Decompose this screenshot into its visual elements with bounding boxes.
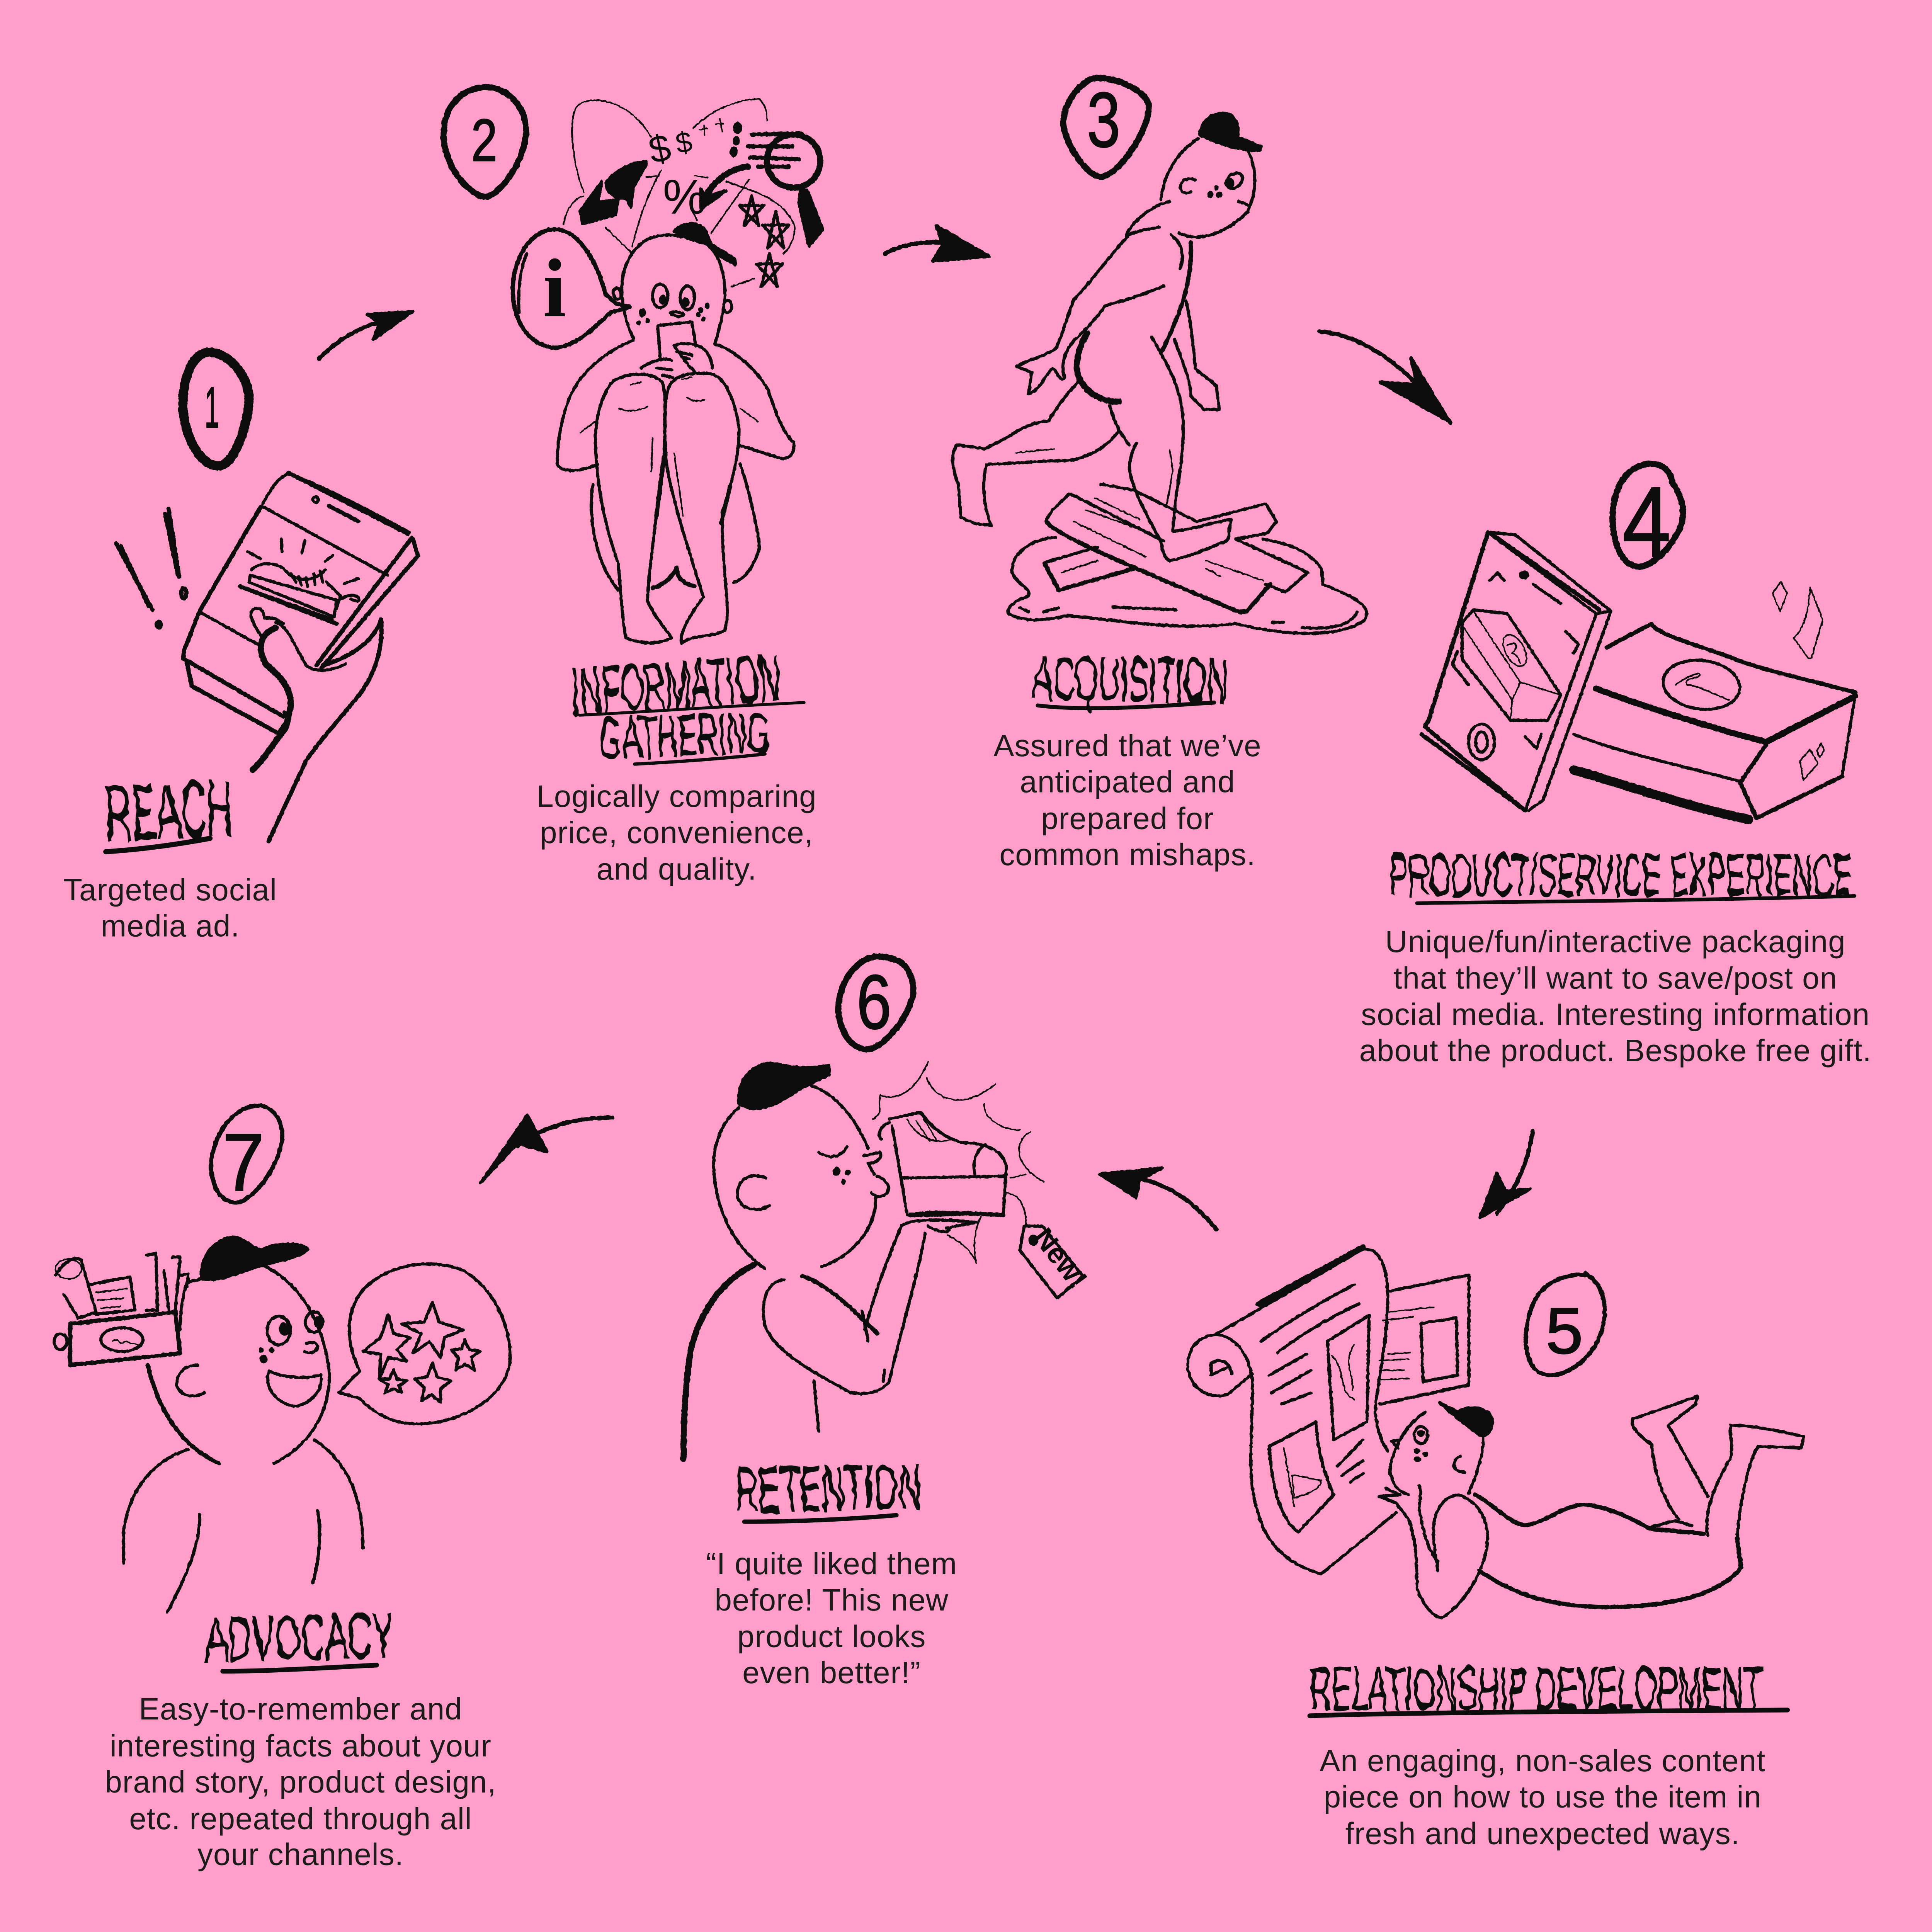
body and arms (1017, 202, 1219, 410)
text: product description: Unique/fun/interactive packaging (1385, 924, 1846, 959)
icon: curved arrow (701, 167, 748, 209)
panel: step 1 reach: REACH (104, 763, 235, 859)
badge digit: 5: 5 (1546, 1294, 1583, 1367)
badge: number 6 circle (838, 956, 913, 1049)
badge: number 2 circle (444, 87, 526, 197)
text: advocacy description: your channels. (197, 1837, 404, 1872)
icon: broken planks (1044, 484, 1308, 612)
panel: step 4 product/service experience (1359, 464, 1872, 1068)
icon: sparkles (1772, 582, 1824, 780)
icon: price tag (1006, 1193, 1083, 1298)
legs (953, 337, 1231, 561)
icon: open box with items (54, 1253, 188, 1365)
text: advocacy description: Easy-to-remember and (139, 1692, 463, 1726)
arm and hand (1379, 1485, 1488, 1618)
body and arm (684, 1220, 976, 1459)
icon: shoe ad on screen (240, 539, 359, 624)
puddle (1008, 537, 1367, 633)
text: advocacy description: brand story, product design, (105, 1765, 497, 1799)
icon: package box (1574, 624, 1855, 820)
illustration: phone and package (1422, 464, 1855, 820)
badge: number 7 circle (211, 1106, 282, 1202)
text: retention description: before! This new (714, 1583, 949, 1617)
speech bubble with stars (338, 1264, 510, 1424)
arrow: 2 to 3 (885, 226, 989, 261)
panel: step 3 acquisition: ACQUISITION (1032, 643, 1230, 717)
arrow: 1 to 2 (319, 311, 413, 359)
arrow: 4 to 5 (1480, 1131, 1533, 1218)
shoulders (124, 1440, 363, 1612)
head with cap (1161, 113, 1261, 237)
text: advocacy description: etc. repeated through all (129, 1801, 472, 1836)
badge: number 1 circle (183, 352, 249, 466)
badge digit: 7: 7 (223, 1117, 264, 1208)
text: advocacy description: interesting facts about your (110, 1728, 492, 1763)
panel: step 3 acquisition (953, 77, 1367, 872)
phone and hands (641, 322, 712, 377)
panel: step 2 information gathering (444, 87, 823, 886)
illustration: person reading scroll (1188, 1247, 1804, 1618)
heading: information gathering: INFORMATION (569, 640, 783, 730)
badge: number 4 circle (1612, 464, 1683, 567)
icon glyph: dollar signs: $ (645, 126, 674, 172)
head with cap (1390, 1403, 1493, 1495)
text: retention description: “I quite liked them (706, 1546, 957, 1581)
text: product description: about the product. Bespoke free gift. (1359, 1033, 1872, 1068)
icon: phone (183, 473, 418, 733)
tag label: New! (1027, 1222, 1094, 1295)
arrow: 6 to 7 (481, 1115, 612, 1183)
illustration: seated person researching (513, 99, 823, 643)
panel: step 5 relationship development (1188, 1247, 1804, 1850)
heading: information gathering: GATHERING (598, 699, 771, 772)
text: acquisition description: common mishaps. (999, 837, 1256, 872)
illustration: person stepping on broken planks (953, 78, 1367, 633)
text: reach description: Targeted social (63, 872, 277, 907)
panel: step 7 advocacy (54, 1106, 510, 1872)
text: information gathering description: and quality. (597, 852, 757, 886)
text: reach description: media ad. (101, 909, 240, 943)
text: information gathering description: price, convenience, (540, 815, 813, 850)
panel: step 1 reach: 1 (205, 375, 219, 440)
text: information gathering description: Logically comparing (536, 779, 817, 813)
heading: acquisition (1032, 643, 1230, 717)
heading: information gathering (569, 640, 804, 772)
heading: advocacy (205, 1600, 395, 1674)
panel: step 1 reach (63, 352, 418, 943)
heading: retention (735, 1451, 922, 1525)
heading: reach (104, 763, 235, 859)
head with cap (613, 224, 735, 344)
text: retention description: even better!” (742, 1655, 921, 1690)
icon: stars (740, 196, 789, 287)
illustration: person kissing a shoe (684, 956, 1083, 1459)
arrow: 3 to 4 (1320, 332, 1450, 423)
icon glyph: dollar signs: $ (673, 125, 695, 160)
icon glyph: dollar signs (645, 125, 695, 172)
text: product description: social media. Interesting information (1361, 997, 1870, 1031)
arrow: 5 to 6 (1099, 1168, 1216, 1230)
text: acquisition description: Assured that we’ve (993, 728, 1262, 763)
badge: number 3 circle (1063, 78, 1149, 177)
text: relationship description: fresh and unexpected ways. (1345, 1816, 1740, 1850)
icon: hand and heart (251, 608, 381, 841)
head with cap (714, 1063, 888, 1269)
icon glyph: percent sign: % (663, 169, 706, 224)
text: product description: that they’ll want to save/post on (1393, 961, 1837, 995)
text: retention description: product looks (737, 1619, 926, 1653)
icon: exclamation marks (116, 509, 186, 628)
speech bubble (513, 230, 630, 348)
icon glyph: info letter: i (543, 242, 566, 334)
body and legs (557, 340, 794, 643)
icon: magnifying glass (748, 133, 823, 246)
head with cap (148, 1237, 329, 1463)
icon: shoe (872, 1062, 1044, 1263)
badge digit: 6: 6 (857, 959, 891, 1045)
text: acquisition description: anticipated and (1020, 765, 1235, 799)
body and legs (1475, 1396, 1804, 1607)
text: relationship description: piece on how to use the item in (1324, 1780, 1762, 1814)
badge: number 5 circle (1526, 1273, 1605, 1375)
illustration: phone ad with hand (116, 352, 418, 841)
icon: thought web (564, 99, 795, 287)
icon: newspaper scroll (1188, 1247, 1469, 1574)
badge digit: 4: 4 (1622, 466, 1671, 578)
illustration: person with box and speech bubble (54, 1106, 510, 1612)
heading: retention: RETENTION (735, 1451, 922, 1525)
heading: advocacy: ADVOCACY (205, 1600, 395, 1674)
badge digit: 2: 2 (471, 107, 497, 173)
text: relationship description: An engaging, non-sales content (1320, 1743, 1765, 1778)
icon: phone showing box (1422, 532, 1611, 811)
text: acquisition description: prepared for (1041, 801, 1214, 835)
badge digit: 3: 3 (1087, 77, 1120, 163)
panel: step 6 retention (684, 956, 1094, 1690)
